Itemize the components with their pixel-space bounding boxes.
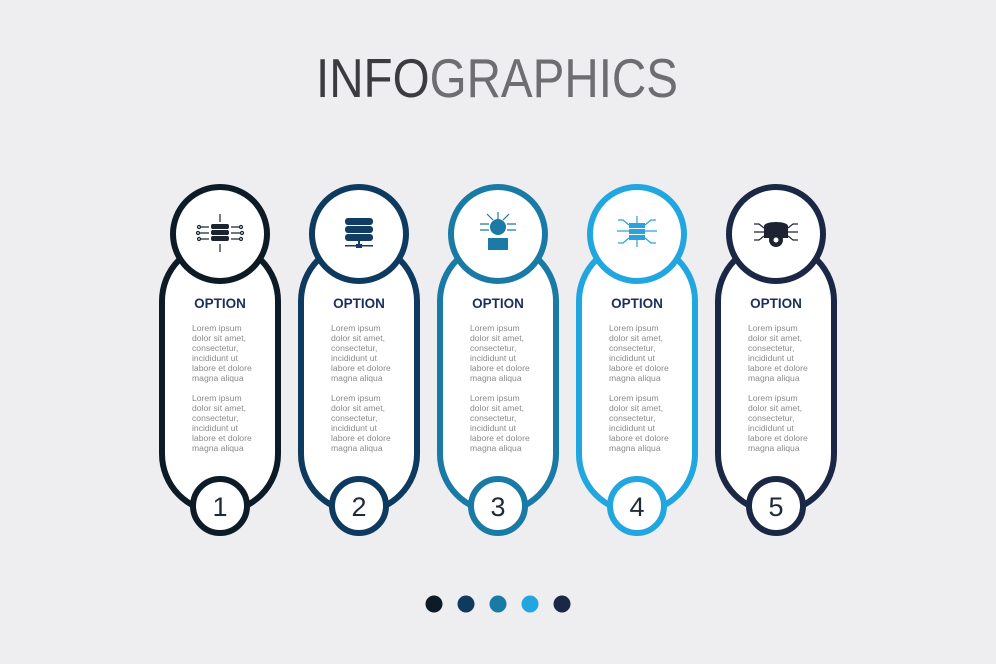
panel 4	[579, 187, 695, 533]
icon: database network	[196, 214, 244, 252]
panel 3: 3	[490, 492, 506, 522]
panel 5	[718, 187, 834, 533]
panel 3	[440, 187, 556, 533]
icon: server	[345, 218, 373, 248]
panel 4: 4	[629, 492, 645, 522]
panel 1: 1	[212, 492, 228, 522]
icon: user network	[480, 212, 516, 250]
panel 1	[162, 187, 278, 533]
icon: server network	[617, 216, 657, 247]
panel 2	[301, 187, 417, 533]
dots legend	[426, 596, 570, 612]
icon: database gear	[754, 222, 798, 247]
panel 2: 2	[351, 492, 367, 522]
panel 5: 5	[768, 492, 784, 522]
title: INFOGRAPHICS	[316, 47, 678, 109]
